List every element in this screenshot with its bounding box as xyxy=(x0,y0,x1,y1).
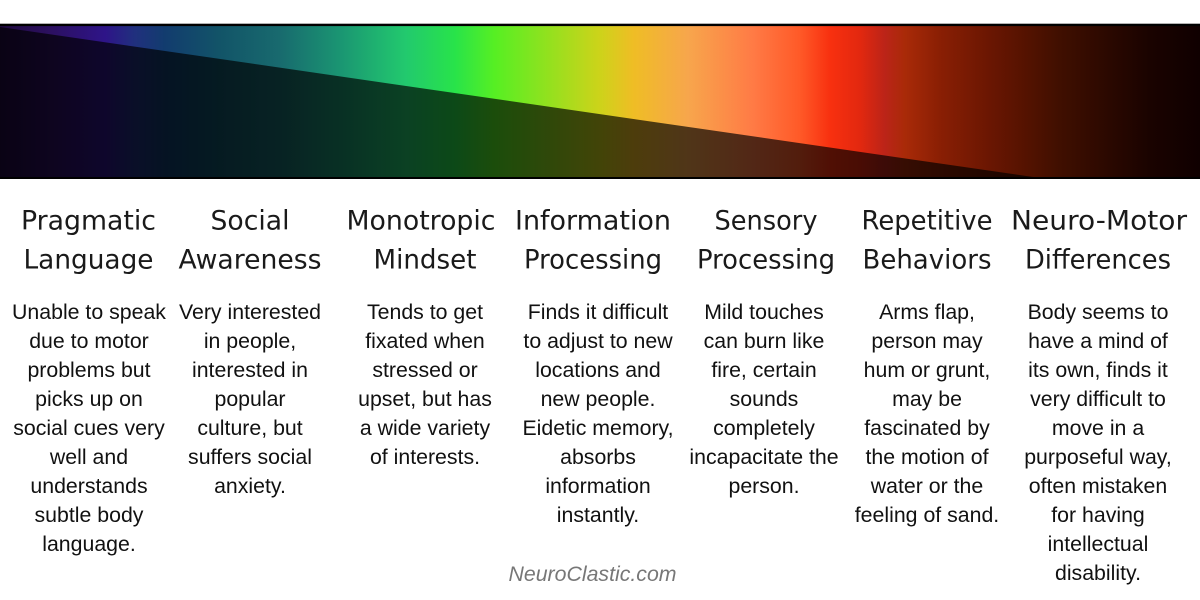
text: Information Processing description: instantly. xyxy=(557,503,639,527)
text: Social Awareness description: in people, xyxy=(204,329,296,353)
text: Sensory Processing description: can burn like xyxy=(704,329,824,353)
text: Information Processing description: Eidetic memory, xyxy=(522,416,674,440)
heading: Sensory Processing xyxy=(697,206,835,276)
text: Information Processing description: new people. xyxy=(541,387,655,411)
heading: Social Awareness: Awareness xyxy=(178,244,322,276)
text: Social Awareness description: suffers social xyxy=(188,445,312,469)
text: Monotropic Mindset description xyxy=(358,300,492,469)
heading: Pragmatic Language xyxy=(21,206,156,276)
text: Monotropic Mindset description: of interests. xyxy=(370,445,480,469)
text: Sensory Processing description xyxy=(689,300,839,498)
heading: Repetitive Behaviors: Repetitive xyxy=(862,206,992,236)
heading: Pragmatic Language: Pragmatic xyxy=(21,206,156,236)
text: Social Awareness description xyxy=(179,300,321,498)
column: Sensory Processing xyxy=(689,206,839,498)
text: Pragmatic Language description: Unable to speak xyxy=(12,300,166,324)
text: Social Awareness description: anxiety. xyxy=(214,474,286,498)
text: Neuro-Motor Differences description: Body seems to xyxy=(1028,300,1168,324)
heading: Information Processing xyxy=(515,206,671,276)
column: Pragmatic Language xyxy=(12,206,166,556)
heading: Neuro-Motor Differences: Neuro-Motor xyxy=(1011,206,1188,236)
column: Monotropic Mindset xyxy=(346,206,496,469)
heading: Monotropic Mindset xyxy=(346,206,496,276)
text: Sensory Processing description: person. xyxy=(728,474,800,498)
text: Monotropic Mindset description: upset, but has xyxy=(358,387,492,411)
text: Social Awareness description: popular xyxy=(214,387,286,411)
spectrum banner xyxy=(0,24,1200,179)
text: Pragmatic Language description: understands xyxy=(30,474,148,498)
text: Sensory Processing description: Mild touches xyxy=(704,300,824,324)
heading: Repetitive Behaviors xyxy=(862,206,992,276)
text: Pragmatic Language description: picks up on xyxy=(35,387,143,411)
text: Information Processing description: Finds it difficult xyxy=(528,300,668,324)
text: Pragmatic Language description: problems but xyxy=(27,358,151,382)
column: Information Processing xyxy=(515,206,674,527)
text: Pragmatic Language description: well and xyxy=(49,445,128,469)
heading: Information Processing: Processing xyxy=(524,244,662,276)
text: Monotropic Mindset description: Tends to get xyxy=(367,300,483,324)
text: Information Processing description: to adjust to new xyxy=(523,329,673,353)
heading: Neuro-Motor Differences xyxy=(1011,206,1188,276)
heading: Repetitive Behaviors: Behaviors xyxy=(862,244,992,276)
text: Neuro-Motor Differences description: often mistaken xyxy=(1029,474,1167,498)
text: Pragmatic Language description: subtle body xyxy=(35,503,144,527)
text: Neuro-Motor Differences description xyxy=(1024,300,1172,585)
text: Sensory Processing description: incapacitate the xyxy=(689,445,839,469)
text: Sensory Processing description: completely xyxy=(713,416,815,440)
column: Social Awareness xyxy=(178,206,322,498)
heading: Sensory Processing: Sensory xyxy=(714,206,818,236)
column: Repetitive Behaviors xyxy=(855,206,999,527)
text: Social Awareness description: interested in xyxy=(192,358,308,382)
text: Information Processing description: information xyxy=(545,474,651,498)
text: Repetitive Behaviors description xyxy=(855,300,999,527)
credit: NeuroClastic.com: NeuroClastic.com xyxy=(508,562,677,586)
text: Repetitive Behaviors description: fascinated by xyxy=(864,416,990,440)
text: Monotropic Mindset description: stressed or xyxy=(372,358,478,382)
text: Sensory Processing description: sounds xyxy=(730,387,798,411)
text: Neuro-Motor Differences description: have a mind of xyxy=(1028,329,1168,353)
text: Pragmatic Language description xyxy=(12,300,166,556)
heading: Social Awareness xyxy=(178,206,322,276)
heading: Social Awareness: Social xyxy=(210,206,290,236)
text: Repetitive Behaviors description: may be xyxy=(892,387,962,411)
text: Repetitive Behaviors description: feeling of sand. xyxy=(855,503,999,527)
heading: Sensory Processing: Processing xyxy=(697,244,835,276)
text: Social Awareness description: culture, but xyxy=(197,416,303,440)
text: Repetitive Behaviors description: person may xyxy=(871,329,983,353)
text: Pragmatic Language description: language. xyxy=(42,532,136,556)
text: Sensory Processing description: fire, certain xyxy=(711,358,817,382)
heading: Information Processing: Information xyxy=(515,206,671,236)
text: Repetitive Behaviors description: water or the xyxy=(870,474,983,498)
heading: Neuro-Motor Differences: Differences xyxy=(1025,244,1171,276)
heading: Monotropic Mindset: Mindset xyxy=(374,244,476,276)
heading: Monotropic Mindset: Monotropic xyxy=(346,206,496,236)
text: Neuro-Motor Differences description: for having xyxy=(1051,503,1145,527)
text: Information Processing description: locations and xyxy=(535,358,661,382)
text: Social Awareness description: Very interested xyxy=(179,300,321,324)
text: Neuro-Motor Differences description: its own, finds it xyxy=(1028,358,1168,382)
text: Repetitive Behaviors description: Arms flap, xyxy=(879,300,975,324)
text: Information Processing description xyxy=(522,300,674,527)
text: Monotropic Mindset description: a wide variety xyxy=(360,416,490,440)
text: Repetitive Behaviors description: the motion of xyxy=(865,445,989,469)
text: Information Processing description: absorbs xyxy=(560,445,636,469)
text: Neuro-Motor Differences description: intellectual xyxy=(1048,532,1148,556)
column: Neuro-Motor Differences xyxy=(1011,206,1188,585)
text: Repetitive Behaviors description: hum or grunt, xyxy=(864,358,990,382)
text: Neuro-Motor Differences description: purposeful way, xyxy=(1024,445,1172,469)
text: Pragmatic Language description: due to motor xyxy=(29,329,149,353)
text: Neuro-Motor Differences description: move in a xyxy=(1052,416,1144,440)
text: Neuro-Motor Differences description: disability. xyxy=(1055,561,1141,585)
text: Neuro-Motor Differences description: very difficult to xyxy=(1030,387,1166,411)
text: Pragmatic Language description: social cues very xyxy=(13,416,165,440)
heading: Pragmatic Language: Language xyxy=(24,244,154,276)
text: Monotropic Mindset description: fixated when xyxy=(365,329,485,353)
